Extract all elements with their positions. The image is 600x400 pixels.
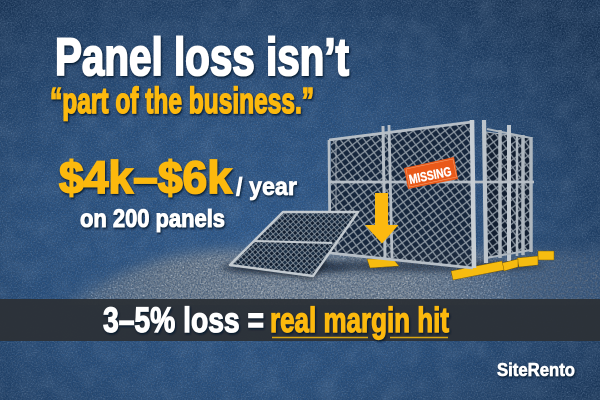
banner text: margin hit: real margin hit bbox=[270, 301, 449, 340]
fence stack bbox=[329, 120, 554, 280]
back fence panels bbox=[486, 125, 531, 261]
cost figure: $4k–$6k bbox=[59, 152, 233, 203]
yellow feet bbox=[367, 251, 554, 280]
subtitle: “part of the business.” bbox=[50, 80, 314, 121]
icon: down arrow bbox=[365, 193, 398, 244]
banner text: loss: 3–5% loss = bbox=[103, 301, 264, 340]
missing sign: MISSING bbox=[408, 164, 453, 187]
title: Panel loss isn’t bbox=[55, 28, 349, 87]
banner bbox=[0, 299, 600, 341]
leaning panel bbox=[229, 212, 358, 279]
ground bbox=[69, 242, 600, 299]
logo: SiteRento bbox=[497, 360, 575, 380]
front fence panel bbox=[329, 120, 534, 268]
underline bbox=[272, 336, 448, 338]
cost unit: / year bbox=[236, 173, 297, 201]
ground shadows bbox=[220, 260, 545, 274]
cost basis: on 200 panels bbox=[80, 205, 225, 233]
missing sign bbox=[404, 157, 458, 189]
